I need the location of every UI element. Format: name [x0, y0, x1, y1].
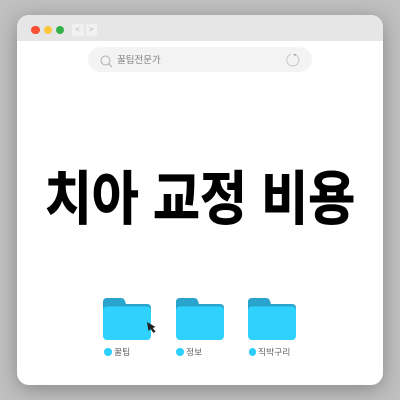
forward button: > [89, 25, 94, 34]
label: 직박구리 [258, 346, 290, 356]
window control: close [31, 26, 40, 34]
search bar [88, 47, 312, 72]
back button: < [75, 25, 80, 34]
folder: 정보 [176, 298, 224, 356]
cursor arrow [147, 322, 156, 333]
window control: maximize [56, 26, 64, 34]
legend dot [176, 348, 184, 356]
search text: 꿀팁전문가 [117, 54, 161, 66]
label: 꿀팁 [114, 346, 130, 356]
legend dot [104, 348, 112, 356]
title: 치아 교정 비용 [45, 152, 355, 236]
icon: reload [286, 54, 300, 66]
forward button [86, 24, 97, 36]
icon: magnifier [100, 56, 112, 68]
folder: 꿀팁 [103, 298, 151, 356]
title bar [17, 15, 383, 41]
label: 정보 [186, 346, 202, 356]
window control: minimize [44, 26, 52, 34]
back button [72, 24, 84, 36]
folder: 직박구리 [248, 298, 296, 356]
legend dot [248, 348, 256, 356]
